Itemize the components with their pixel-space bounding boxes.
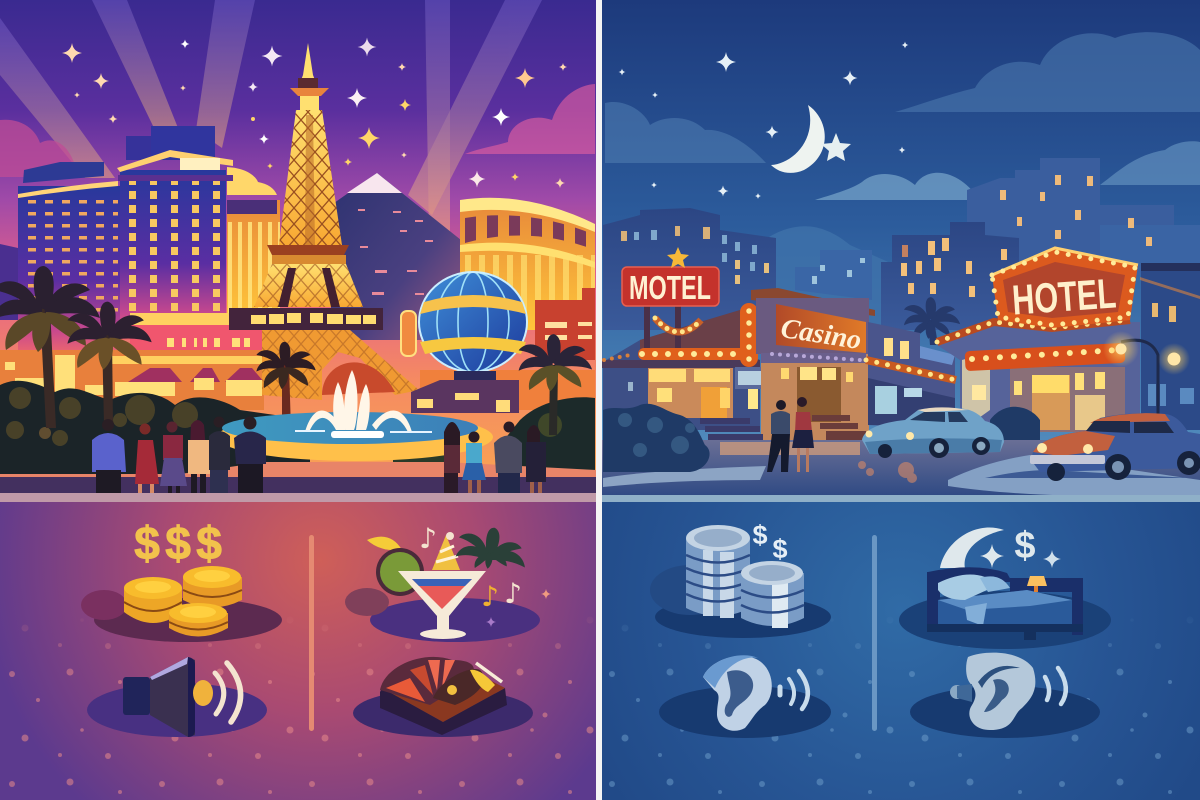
neon capsule sign <box>401 311 416 356</box>
palm tree 3 <box>256 342 316 430</box>
mountains <box>757 226 895 330</box>
icon: bed with moon and lamp <box>899 525 1111 649</box>
clouds <box>605 32 1200 200</box>
hotel sign: HOTEL <box>1011 269 1118 324</box>
fountain and pool <box>217 370 493 461</box>
person 3 skirt <box>160 422 187 496</box>
Eiffel Tower replica <box>229 43 419 400</box>
right buildings <box>1130 263 1200 430</box>
icon: ear with sound waves <box>659 655 831 738</box>
icon: dollar signs and gold coins <box>81 517 282 642</box>
palm tree 2 <box>67 302 152 425</box>
icon: cocktail with party elements <box>345 522 551 642</box>
pyramid hotel <box>330 173 461 340</box>
motel marquee lights <box>604 303 758 367</box>
central hotel tower <box>117 126 233 340</box>
icon: poker chip stacks <box>650 520 831 638</box>
icon: cocktail with party elements: ♪ <box>504 577 522 610</box>
spotlight beams <box>0 0 542 235</box>
person 4 cream top <box>188 420 210 496</box>
palm tree 1 <box>0 266 100 428</box>
palm tree 4 <box>519 334 592 435</box>
motel sign <box>622 247 719 355</box>
left apartment block <box>603 208 776 330</box>
stars <box>62 38 567 188</box>
casino steps and forecourt <box>700 415 866 444</box>
annex building with lights <box>866 322 956 430</box>
casino building <box>751 288 875 445</box>
person 10 dark dress <box>526 425 546 496</box>
gold casino tower <box>227 200 280 320</box>
hedge bushes <box>603 404 1040 472</box>
back city buildings right <box>967 158 1200 275</box>
clouds <box>0 84 595 195</box>
motel building <box>600 310 763 430</box>
globe balloon landmark <box>411 272 527 413</box>
person 2 red dress <box>135 424 159 496</box>
orange and blue parked car <box>1030 413 1200 481</box>
icon: poker chip stacks: $ <box>752 520 768 550</box>
person 6 navy shirt <box>234 416 266 496</box>
street lamp <box>1103 331 1190 414</box>
small distant block <box>795 250 872 300</box>
panel: Las Vegas Strip night scene <box>0 0 596 500</box>
icon: loudspeaker <box>87 657 267 737</box>
red side building <box>420 288 595 410</box>
person 9 grey shirt <box>494 422 522 496</box>
motel sign: MOTEL <box>629 269 711 306</box>
curved palace hotel <box>460 198 595 330</box>
ground and curbs <box>602 440 1200 496</box>
vertical divider <box>872 535 877 731</box>
icon: dollar signs and gold coins: $ <box>165 517 191 569</box>
palm silhouette <box>904 297 960 345</box>
pale kerb lines <box>0 493 1200 502</box>
icon: ear with earplug <box>910 653 1100 738</box>
vertical divider <box>309 535 314 731</box>
mid apartment block <box>881 222 1019 330</box>
person 1 blue shirt <box>92 419 126 496</box>
tourists watching <box>92 416 546 496</box>
moon and stars <box>771 105 851 173</box>
panel: off-strip night scene <box>600 0 1200 500</box>
icon: dollar signs and gold coins: $ <box>196 517 222 569</box>
icon: poker chip stacks: $ <box>772 534 788 564</box>
hotel building <box>937 322 1140 432</box>
panel: left cost and noise icons <box>0 502 596 800</box>
dark edge block <box>0 244 18 320</box>
hotel marquee <box>937 320 1130 371</box>
person 5 dark shirt <box>209 416 230 496</box>
casino building: Casino <box>779 313 863 356</box>
ground strip <box>0 462 596 496</box>
person 8 blue dress <box>462 432 486 496</box>
panel: right cost and noise icons <box>602 502 1200 800</box>
icon: gaming wheel box <box>353 657 533 737</box>
couple walking <box>767 397 814 472</box>
central white divider <box>596 0 602 800</box>
left hotel tower <box>18 162 120 356</box>
sky stars <box>618 42 908 199</box>
icon: bed with moon and lamp: $ <box>1014 525 1036 567</box>
icon: cocktail with party elements: ♪ <box>419 522 437 555</box>
icon: cocktail with party elements: ♪ <box>481 580 499 613</box>
person 7 long hair <box>444 422 460 496</box>
shrubs <box>0 381 595 478</box>
base podium buildings <box>0 313 265 410</box>
blue parked car <box>862 407 1004 458</box>
icon: dollar signs and gold coins: $ <box>134 517 160 569</box>
hotel sign <box>992 248 1138 328</box>
